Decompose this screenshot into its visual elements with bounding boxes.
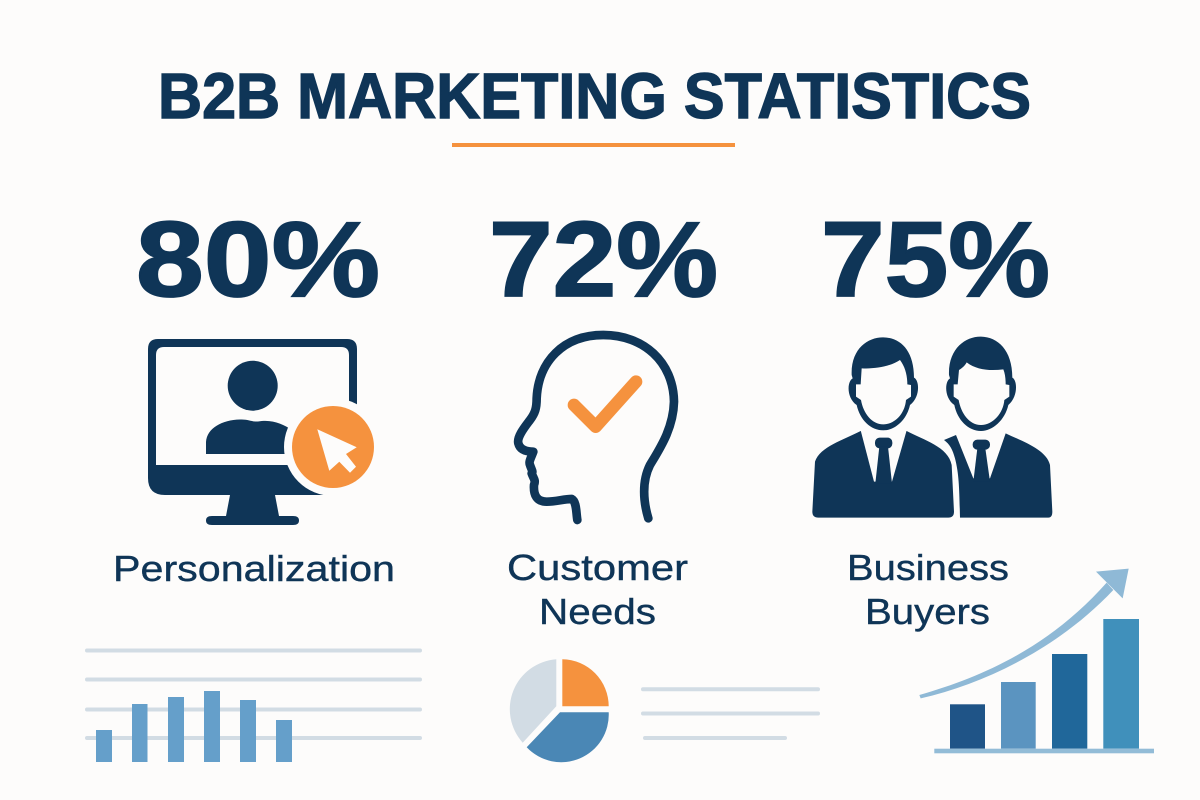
chart: pie chart (510, 659, 609, 762)
label: Customer Needs (507, 547, 688, 632)
chart: growth bars with rising arrow (919, 569, 1154, 753)
label: Business Buyers: Business (847, 547, 1009, 588)
label: Business Buyers (847, 547, 1009, 632)
icon: two business people (812, 337, 1052, 518)
icon: head with check mark (518, 335, 674, 520)
stat: 75%: 75% (821, 199, 1050, 319)
label: Customer Needs: Customer (507, 547, 688, 588)
title: B2B MARKETING STATISTICS (158, 60, 1031, 132)
text placeholder lines (641, 687, 820, 740)
panel: business buyers (812, 199, 1052, 632)
stat: 80%: 80% (136, 199, 380, 319)
chart: small bar chart with grid lines (85, 648, 422, 762)
icon: monitor with user and cursor (148, 339, 382, 525)
arrow: upward trend (919, 569, 1129, 698)
panel: customer needs (489, 199, 718, 632)
label: Customer Needs: Needs (539, 591, 656, 632)
growth bars (934, 619, 1154, 753)
title underline (452, 143, 735, 147)
panel: personalization (113, 199, 395, 589)
label: Personalization: Personalization (113, 548, 395, 589)
label: Business Buyers: Buyers (865, 591, 990, 632)
stat: 72%: 72% (489, 199, 718, 319)
